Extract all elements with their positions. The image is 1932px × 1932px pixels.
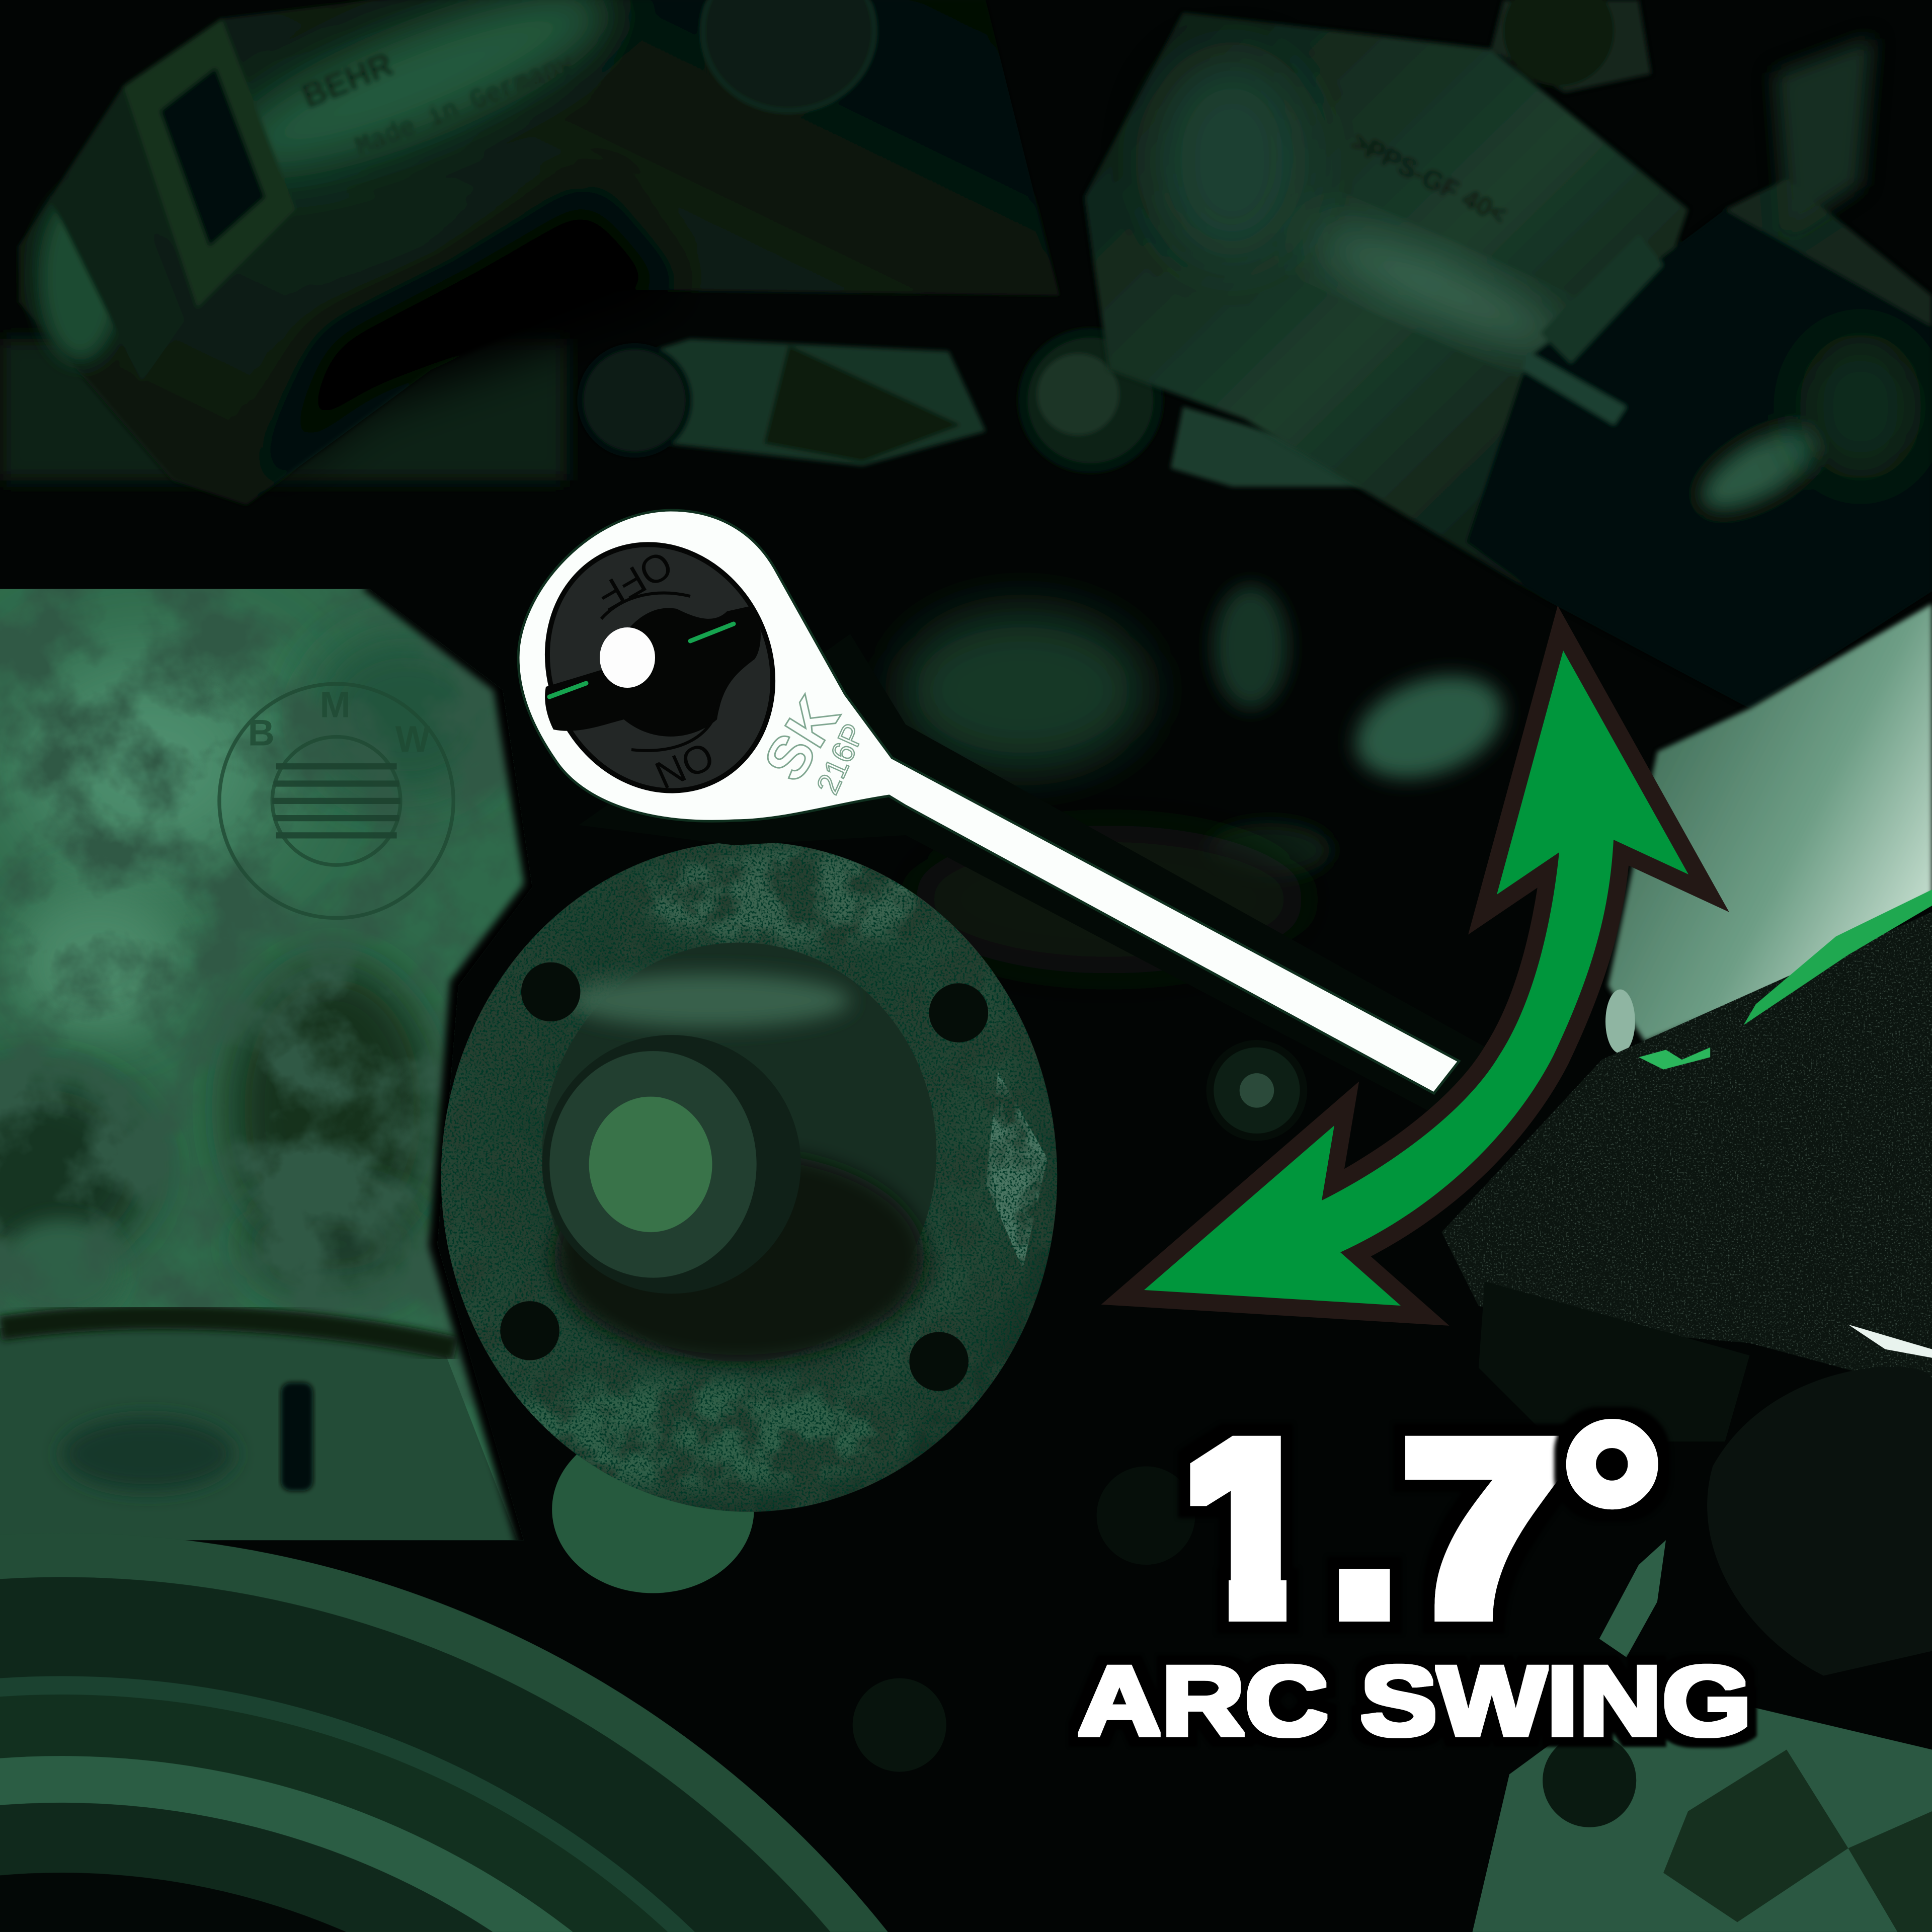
lower dark bolts: [853, 1043, 1304, 1772]
small pale pipe end: [1605, 990, 1635, 1054]
upper engine block bands: [0, 339, 1517, 974]
flange hub: [431, 838, 1072, 1528]
left mottled panel: [0, 579, 542, 1553]
SK brand: SK: [751, 685, 852, 792]
BMW roundel embossed: [219, 683, 453, 918]
big number: .: [1330, 1390, 1399, 1666]
ratchet disc: [508, 507, 813, 828]
big number: 1: [1181, 1390, 1319, 1666]
cylinder lettering: >PPS-GF 40<: [1346, 126, 1512, 230]
small bracket under flange: [552, 1425, 754, 1593]
BMW roundel embossed: W: [395, 718, 431, 760]
big number: °: [1560, 1370, 1664, 1662]
model number: 216P: [810, 718, 871, 799]
top-right cylinder: [1084, 0, 1932, 708]
ratchet wrench: [508, 507, 1484, 1127]
direction knob: [545, 606, 761, 737]
BMW roundel embossed: B: [248, 712, 275, 754]
top-left hose: Made in Germany: [352, 48, 578, 163]
big number: 7: [1401, 1391, 1564, 1666]
OFF label: OFF: [590, 542, 680, 620]
middle plates and bolts: [580, 333, 1454, 487]
bottom-right casting: [1473, 1540, 1932, 1932]
bottom-left pulley: [0, 1533, 888, 1932]
BMW roundel embossed: M: [320, 683, 351, 725]
ON label: ON: [649, 734, 720, 798]
double-headed curved arrow: [1144, 651, 1688, 1306]
right pale casting: [1608, 604, 1932, 1041]
top-left hose: [19, 0, 1060, 505]
knob pin: [600, 627, 655, 688]
knob slots: [549, 624, 734, 697]
big number: [1181, 1370, 1664, 1666]
gloved hand: [1429, 890, 1932, 1676]
caption: ARC SWING: [1078, 1646, 1752, 1756]
direction arcs: [601, 593, 719, 751]
hose lettering: BEHR: [297, 46, 398, 115]
wrench body: [518, 510, 1459, 1093]
